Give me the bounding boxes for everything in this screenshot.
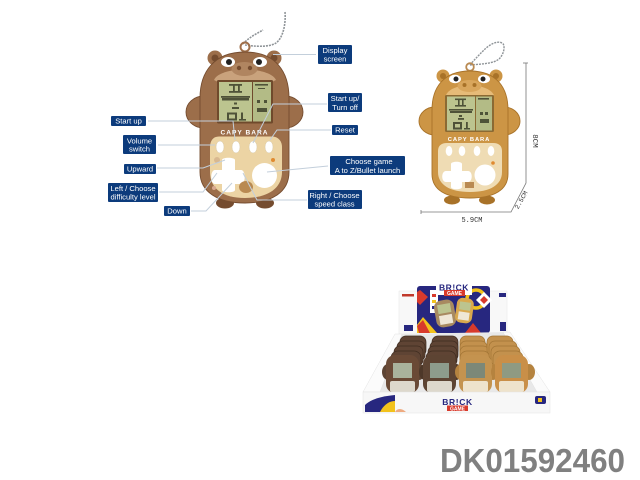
round button <box>252 163 277 188</box>
box logo <box>436 282 472 297</box>
top buttons <box>446 146 494 156</box>
box back panel <box>399 291 507 334</box>
dimension: height: 8CM <box>530 134 538 148</box>
box logo: GAME <box>447 291 463 297</box>
display box with toys <box>363 282 550 413</box>
label: Right / Choose speed class: Right / Choose <box>309 191 360 200</box>
label: Volume switch <box>123 135 156 154</box>
artwork toy: brown <box>433 298 457 329</box>
label: Left / Choose difficulty level: difficulty level <box>110 192 156 202</box>
label: Right / Choose speed class: speed class <box>314 200 355 208</box>
box front artwork <box>365 395 395 412</box>
label: Start up / Turn off: Turn off <box>332 103 359 112</box>
label: Right / Choose speed class <box>308 190 362 209</box>
front row toys <box>382 355 535 393</box>
artwork toy: gold <box>454 297 475 324</box>
screen <box>217 80 273 124</box>
decoration <box>465 182 474 188</box>
box artwork <box>417 286 492 333</box>
nose <box>232 62 258 76</box>
key chain <box>243 12 285 46</box>
d-pad <box>211 158 245 192</box>
label: Left / Choose difficulty level <box>108 183 158 202</box>
screen pixels <box>221 84 268 121</box>
box logo: BR!CK <box>439 282 469 292</box>
label: Down: Down <box>167 207 187 216</box>
label: Choose game <box>330 156 405 175</box>
muzzle band <box>446 85 494 96</box>
dimension: depth: 2.5CM <box>514 190 530 210</box>
brand name: CAPY BARA <box>220 130 269 136</box>
eyes <box>221 57 235 67</box>
nose <box>458 80 482 92</box>
eyes <box>449 75 461 83</box>
brown toy: annotated device <box>186 12 303 208</box>
body <box>432 71 508 198</box>
display box with toys: GAME <box>450 406 466 412</box>
label: Reset <box>332 125 358 135</box>
label: Choose game: Choose game <box>345 157 393 166</box>
tray interior <box>363 332 550 392</box>
back rows of toys <box>391 336 523 373</box>
dimension lines <box>421 63 528 214</box>
brand name: CAPY BARA <box>448 137 490 143</box>
key chain <box>470 42 504 65</box>
wings <box>186 96 222 128</box>
decoration <box>239 181 253 193</box>
label: Display screen <box>318 45 352 64</box>
box front logo: BR!CK <box>442 397 473 407</box>
screen pixels <box>449 98 489 130</box>
side pixel marks <box>404 325 413 331</box>
label: Volume switch: switch <box>129 144 150 154</box>
label: Start up / Turn off: Start up/ <box>331 94 360 103</box>
feet <box>444 196 460 204</box>
label: Down <box>164 206 190 216</box>
ears <box>208 50 222 66</box>
product code: DK01592460 <box>440 442 625 479</box>
label: Start up <box>111 116 146 126</box>
label: Left / Choose difficulty level: Left / Choose <box>110 184 156 193</box>
control panel <box>438 143 502 192</box>
box front badge <box>535 396 546 404</box>
box front <box>363 392 550 413</box>
feet <box>216 198 234 208</box>
round button <box>474 164 496 186</box>
muzzle band <box>214 70 276 82</box>
label: Volume switch: Volume <box>127 136 152 146</box>
ears <box>436 70 450 82</box>
label: Choose game: A to Z/Bullet launch <box>335 166 400 175</box>
label: Display screen: screen <box>324 54 346 64</box>
label: Start up: Start up <box>115 117 142 126</box>
gold toy: dimensioned device <box>419 42 520 204</box>
callout lines <box>148 54 331 211</box>
body <box>200 52 289 203</box>
label: Display screen: Display <box>323 46 348 55</box>
dimension: width: 5.9CM <box>461 217 483 225</box>
wings <box>419 107 451 135</box>
top buttons <box>216 141 273 153</box>
label: Start up / Turn off <box>328 93 362 112</box>
screen <box>445 95 494 132</box>
d-pad <box>442 162 472 189</box>
label: Reset: Reset <box>335 126 356 135</box>
control panel <box>210 136 282 198</box>
label: Upward: Upward <box>127 165 153 174</box>
